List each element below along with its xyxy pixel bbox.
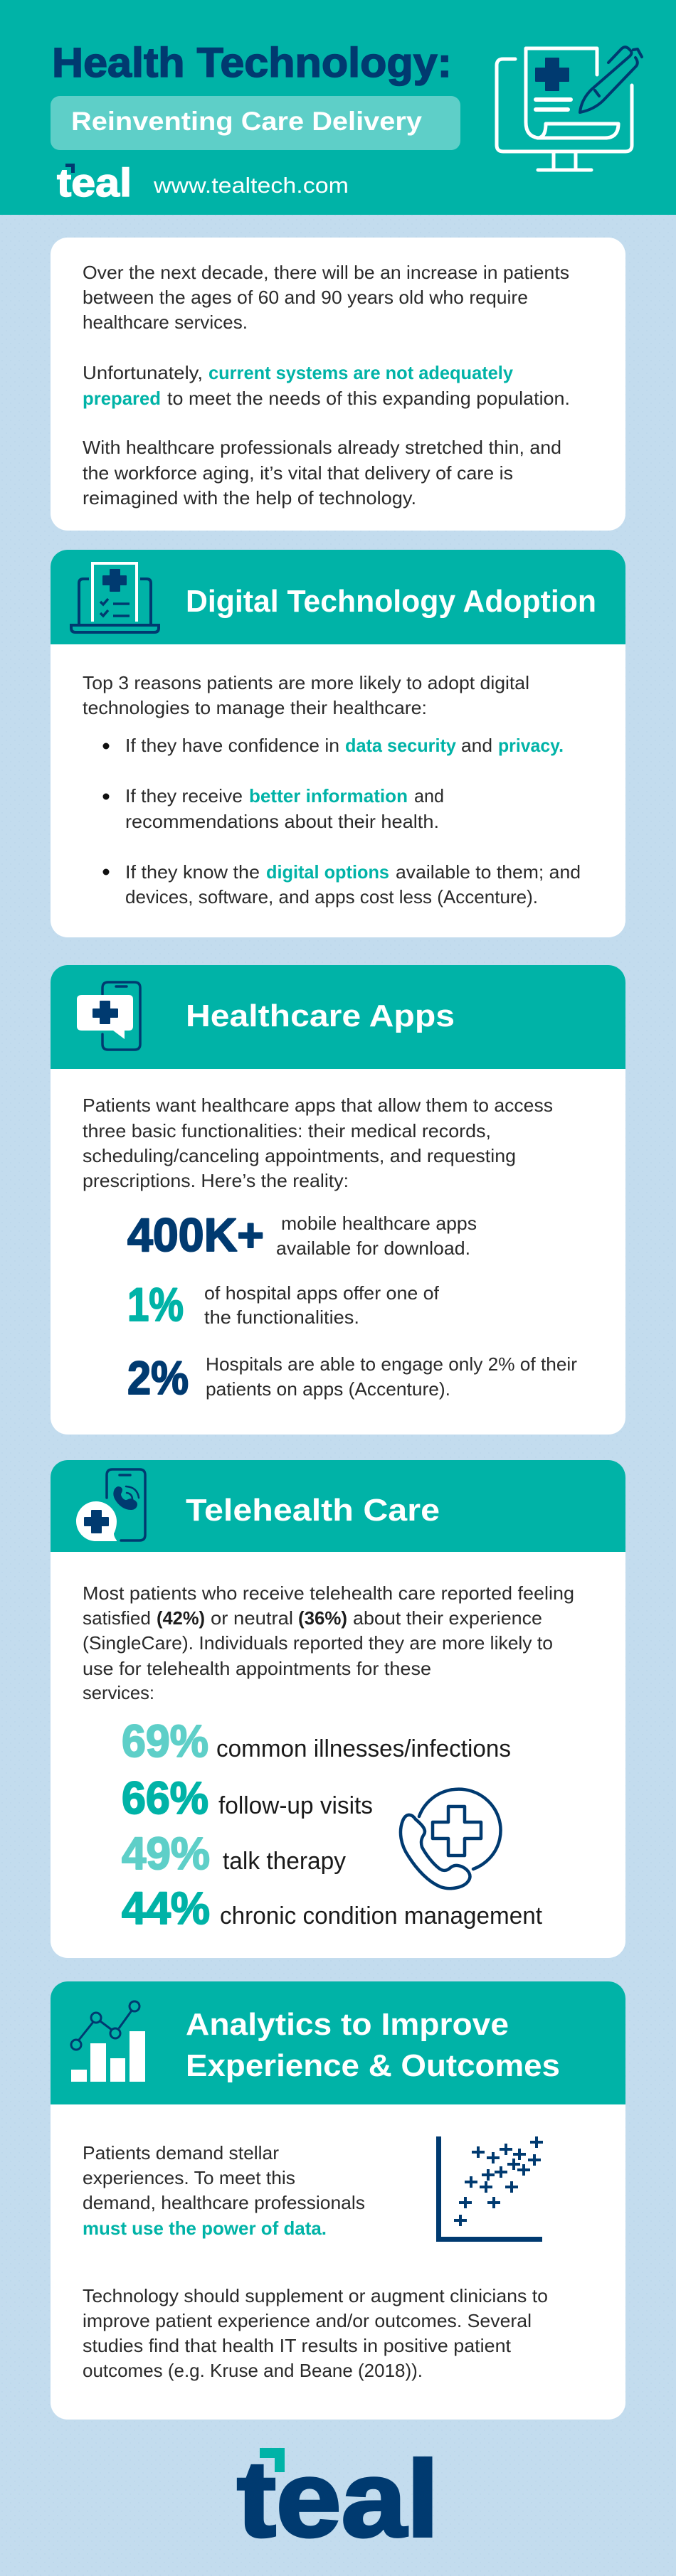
bullet: better information: recommendations about their health. (125, 811, 439, 832)
bullet: digital options: If they know the (125, 861, 260, 883)
text: intro paragraph 2: Unfortunately, (83, 362, 203, 383)
stat: 1% (127, 1278, 440, 1331)
text: lead-in: prescriptions. Here’s the reality: (83, 1170, 349, 1191)
text: lead-in: three basic functionalities: their medical records, (83, 1120, 491, 1141)
stat: 2%: 2% (127, 1351, 189, 1404)
stat: 66% follow-up visits (122, 1772, 373, 1824)
text: patients demand: experiences. To meet this (83, 2167, 295, 2188)
text: technology should supplement: studies find that health IT results in positive patient (83, 2335, 512, 2356)
bullet: digital options (102, 861, 581, 908)
text: intro paragraph 2: current systems are not adequately (208, 362, 514, 383)
text: lead-in: Most patients who receive telehealth care reported feeling (83, 1582, 574, 1604)
text: lead-in: about their experience (353, 1607, 542, 1629)
bullet: digital options: available to them; and (396, 861, 581, 883)
text: lead-in: (SingleCare). Individuals reported they are more likely to (83, 1632, 553, 1654)
bullet: better information: and (414, 785, 444, 807)
icon: laptop with checklist (71, 563, 159, 632)
icon: phone with medical speech bubble (77, 982, 140, 1050)
icon: phone call with medical bubble (76, 1469, 145, 1541)
stat: 44% chronic condition management (122, 1883, 543, 1934)
text: intro paragraph 1: between the ages of 60 and 90 years old who require (83, 287, 528, 308)
stat: 44% chronic condition management: chronic condition management (220, 1902, 543, 1930)
header banner (0, 0, 676, 215)
website url: www.tealtech.com (153, 173, 349, 198)
icon: phone handset with medical cross (401, 1789, 501, 1888)
text: lead-in: technologies to manage their healthcare: (83, 697, 427, 718)
text: technology should supplement: outcomes (e.g. Kruse and Beane (2018)). (83, 2360, 423, 2381)
text: lead-in: (42%) (157, 1607, 205, 1629)
text: intro paragraph 3: reimagined with the help of technology. (83, 487, 416, 509)
stat: 1%: of hospital apps offer one of (204, 1282, 440, 1304)
stat: 69% common illnesses: common illnesses/infections (216, 1735, 511, 1762)
stat: 400K+ (127, 1208, 477, 1261)
subtitle pill (51, 96, 460, 150)
text: lead-in: Patients want healthcare apps that allow them to access (83, 1095, 553, 1116)
text: intro paragraph 3: the workforce aging, it’s vital that delivery of care is (83, 462, 513, 484)
text: intro paragraph 3: With healthcare professionals already stretched thin, and (83, 437, 561, 458)
stat: 69% common illnesses (122, 1715, 511, 1767)
panel: introduction (51, 238, 625, 531)
text: lead-in: use for telehealth appointments for these (83, 1658, 431, 1679)
chart: scatter plot (436, 2136, 543, 2242)
panel: healthcare apps (51, 965, 625, 1435)
heading: Telehealth Care (186, 1493, 440, 1528)
stat: 66% follow-up visits: 66% (122, 1772, 208, 1824)
text: lead-in: satisfied (83, 1607, 151, 1629)
text: lead-in: scheduling/canceling appointments, and requesting (83, 1145, 516, 1166)
panel: telehealth care (51, 1460, 625, 1958)
text: lead-in: (36%) (298, 1607, 347, 1629)
bullet: data security (102, 735, 564, 756)
stat: 69% common illnesses: 69% (122, 1715, 208, 1767)
footer logo: teal (237, 2439, 439, 2560)
text: lead-in (83, 1582, 574, 1703)
panel: digital technology adoption (51, 550, 625, 937)
text: intro paragraph 1: healthcare services. (83, 312, 248, 333)
heading (186, 2007, 560, 2083)
icon: monitor with medical record and pen (497, 47, 642, 170)
icon: bar chart with trend line (71, 2001, 145, 2082)
stat: 2%: patients on apps (Accenture). (206, 1378, 450, 1400)
text: intro paragraph 3 (83, 437, 561, 509)
text: lead-in (83, 672, 529, 718)
text: intro paragraph 2: to meet the needs of this expanding population. (167, 388, 570, 409)
header logo: teal (57, 160, 132, 205)
title: Health Technology: (52, 40, 452, 86)
text: technology should supplement: Technology should supplement or augment clinicians to (83, 2285, 548, 2306)
text: lead-in: services: (83, 1682, 154, 1703)
stat: 66% follow-up visits: follow-up visits (218, 1792, 373, 1819)
text: patients demand: must use the power of data. (83, 2218, 327, 2239)
text: lead-in: Top 3 reasons patients are more likely to adopt digital (83, 672, 529, 693)
text: patients demand (83, 2142, 365, 2239)
bullet: better information: If they receive (125, 785, 243, 807)
text: patients demand: demand, healthcare professionals (83, 2192, 365, 2213)
bullet: better information: better information (249, 785, 408, 807)
stat: 400K+: mobile healthcare apps (281, 1213, 477, 1234)
text: intro paragraph 1: Over the next decade, there will be an increase in patients (83, 262, 569, 283)
stat: 1%: the functionalities. (204, 1306, 359, 1328)
heading: Analytics to Improve (186, 2007, 509, 2042)
bullet: data security: and (461, 735, 492, 756)
text: patients demand: Patients demand stellar (83, 2142, 279, 2163)
text: technology should supplement: improve patient experience and/or outcomes. Several (83, 2310, 532, 2331)
stat: 1%: 1% (127, 1278, 184, 1331)
bullet: data security: If they have confidence in (125, 735, 339, 756)
stat: 49% talk therapy: 49% (122, 1828, 210, 1879)
heading: Digital Technology Adoption (186, 584, 596, 619)
text: intro paragraph 2 (83, 362, 570, 409)
bullet: data security: data security (345, 735, 457, 756)
text: lead-in: or neutral (211, 1607, 293, 1629)
subtitle pill: Reinventing Care Delivery (71, 107, 422, 136)
bullet: data security: privacy. (498, 735, 564, 756)
stat: 2% (127, 1351, 577, 1404)
stat: 400K+: available for download. (276, 1238, 470, 1259)
stat: 400K+: 400K+ (127, 1208, 264, 1261)
heading: Healthcare Apps (186, 999, 455, 1033)
bullet: digital options: digital options (266, 861, 389, 883)
stat: 49% talk therapy (122, 1828, 346, 1879)
text: intro paragraph 2: prepared (83, 388, 161, 409)
text: lead-in (83, 1095, 553, 1191)
heading: Experience & Outcomes (186, 2048, 560, 2083)
stat: 2%: Hospitals are able to engage only 2% of their (206, 1353, 577, 1375)
text: technology should supplement (83, 2285, 548, 2381)
panel: analytics (51, 1981, 625, 2420)
bullet: digital options: devices, software, and apps cost less (Accenture). (125, 886, 538, 908)
stat: 44% chronic condition management: 44% (122, 1883, 210, 1934)
stat: 49% talk therapy: talk therapy (223, 1848, 346, 1875)
bullet: better information (102, 785, 444, 832)
text: intro paragraph 1 (83, 262, 569, 333)
